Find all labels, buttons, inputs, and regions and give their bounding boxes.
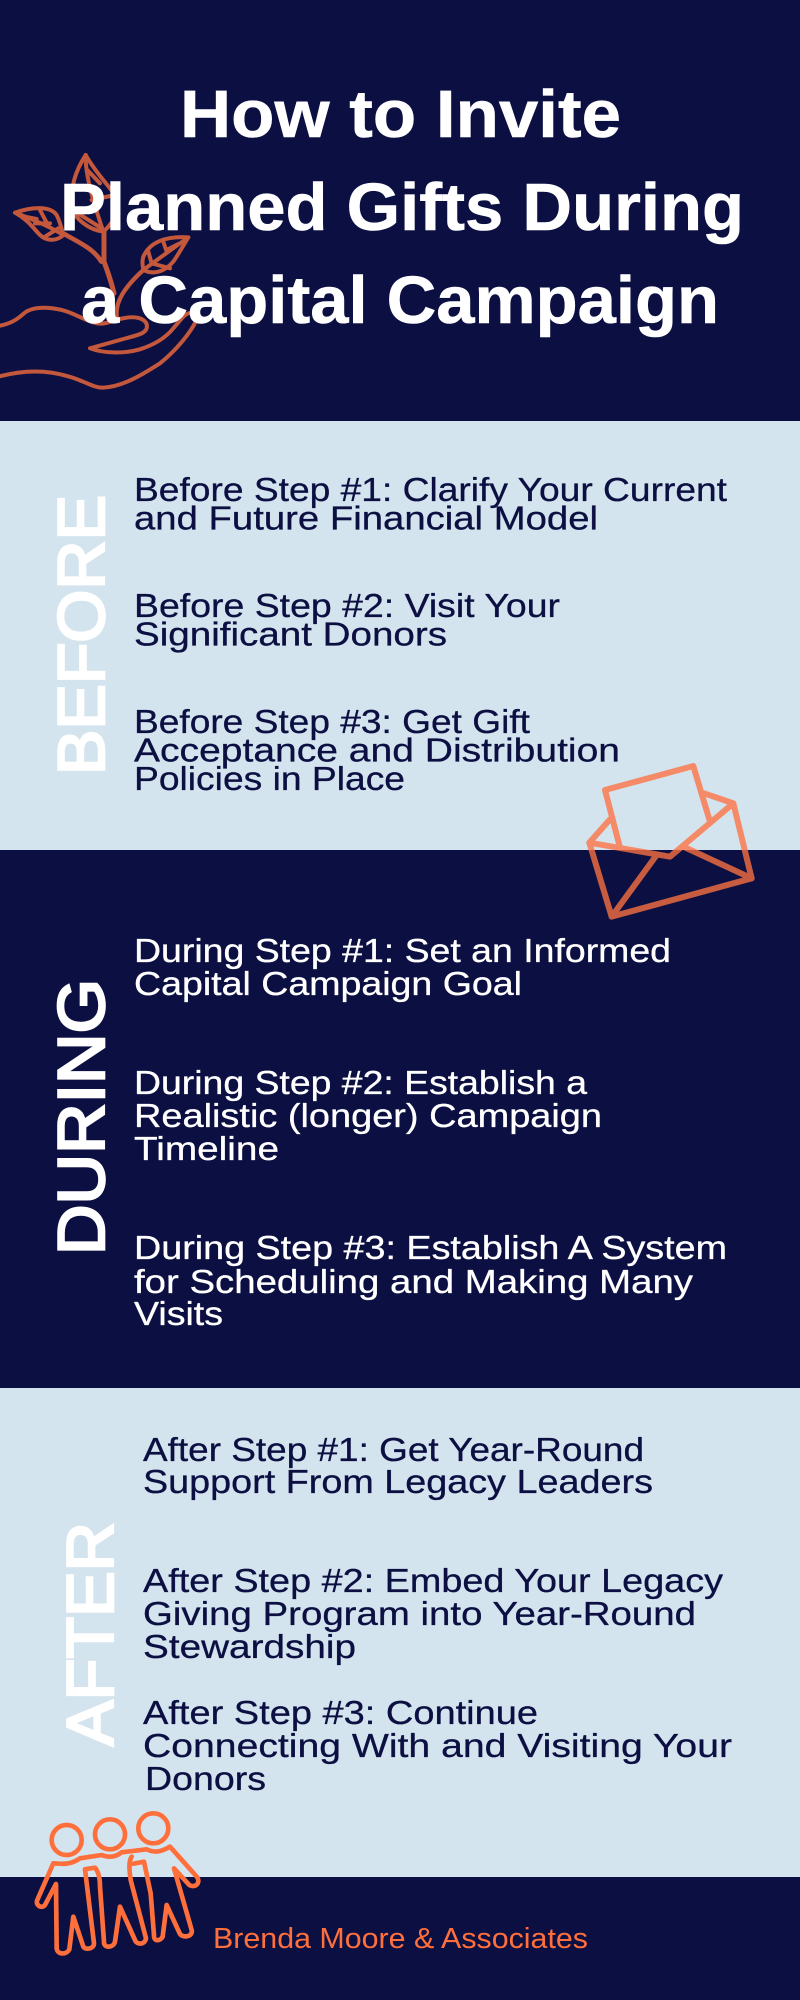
- text: during step 1: [134, 932, 671, 1002]
- text: before step 3: [134, 703, 620, 797]
- text: during step 1: Capital Campaign Goal: [134, 965, 522, 1002]
- text: after step 3: [143, 1694, 732, 1797]
- text: during step 3: During Step #3: Establish A System: [134, 1229, 727, 1266]
- heading: BEFORE: BEFORE: [44, 495, 118, 775]
- text: before step 2: Significant Donors: [134, 616, 447, 652]
- text: during step 2: Realistic (longer) Campaign: [134, 1097, 602, 1134]
- panel: before band: [0, 421, 800, 850]
- panel: after band: [0, 1388, 800, 1877]
- title: a Capital Campaign: [81, 263, 719, 338]
- text: after step 3: Connecting With and Visiting Your: [143, 1727, 732, 1764]
- text: after step 3: After Step #3: Continue: [143, 1694, 538, 1731]
- text: before step 2: [134, 587, 560, 652]
- text: before step 3: Acceptance and Distribution: [134, 732, 620, 768]
- text: after step 2: Stewardship: [143, 1628, 356, 1665]
- text: after step 2: After Step #2: Embed Your Legacy: [143, 1562, 724, 1599]
- heading: DURING: DURING: [44, 979, 118, 1255]
- text: before step 1: [134, 471, 727, 536]
- text: before step 1: Before Step #1: Clarify Your Current: [134, 471, 727, 508]
- text: during step 3: for Scheduling and Making Many: [134, 1263, 694, 1300]
- text: after step 1: After Step #1: Get Year-Round: [143, 1431, 644, 1468]
- icon: hand holding plant: [0, 155, 197, 388]
- text: before step 3: Policies in Place: [134, 760, 405, 797]
- text: during step 3: [134, 1229, 727, 1332]
- icon: three people: [37, 1813, 198, 1953]
- text: during step 1: During Step #1: Set an Informed: [134, 932, 671, 969]
- title: How to Invite: [180, 77, 621, 152]
- panel: during band: [0, 850, 800, 1388]
- text: during step 3: Visits: [134, 1295, 223, 1332]
- text: after step 1: Support From Legacy Leaders: [143, 1463, 653, 1500]
- footer: organisation name: Brenda Moore & Associates: [213, 1923, 588, 1955]
- panel: footer band: [0, 1877, 800, 2000]
- title: Planned Gifts During: [60, 170, 744, 245]
- text: during step 2: During Step #2: Establish a: [134, 1064, 588, 1101]
- text: after step 1: [143, 1431, 653, 1500]
- text: before step 1: and Future Financial Model: [134, 500, 598, 536]
- text: before step 3: Before Step #3: Get Gift: [134, 703, 530, 740]
- icon: open envelope: [589, 766, 752, 917]
- text: after step 3: Donors: [145, 1760, 266, 1797]
- text: before step 2: Before Step #2: Visit Your: [134, 587, 560, 624]
- panel: header band: [0, 0, 800, 421]
- text: after step 2: Giving Program into Year-Round: [143, 1595, 696, 1632]
- title: [60, 77, 744, 338]
- heading: AFTER: AFTER: [53, 1522, 127, 1746]
- text: after step 2: [143, 1562, 724, 1665]
- text: during step 2: Timeline: [134, 1130, 279, 1167]
- text: during step 2: [134, 1064, 602, 1167]
